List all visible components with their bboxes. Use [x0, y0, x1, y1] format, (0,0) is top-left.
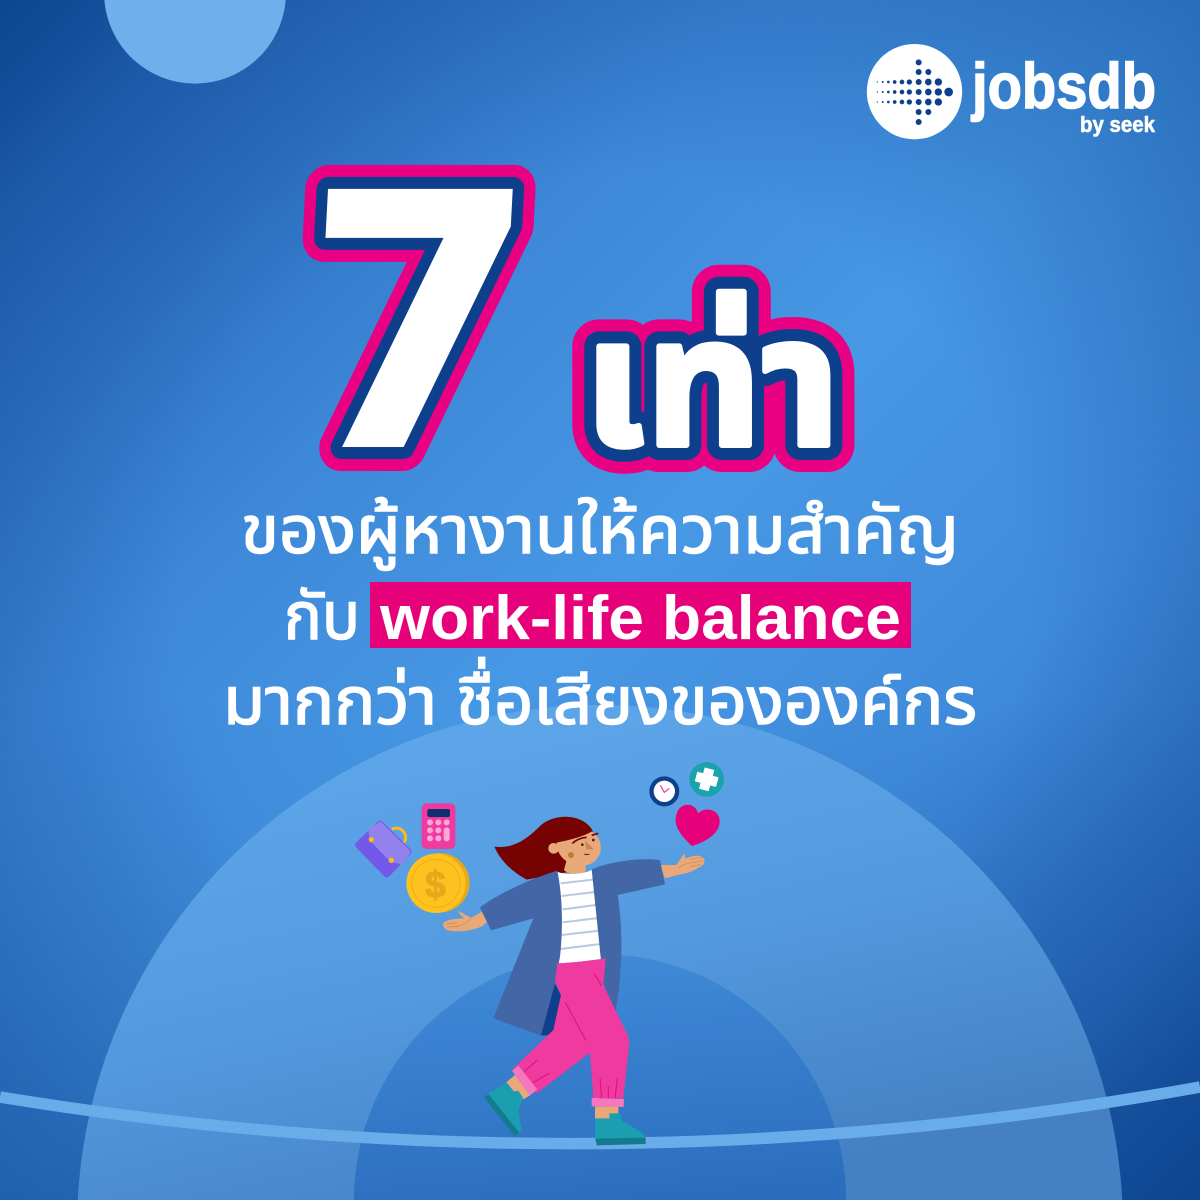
- icon: medical plus: [689, 762, 724, 797]
- highlighted phrase: work-life balance: [379, 584, 901, 653]
- inner arch: [354, 954, 846, 1200]
- icon: clock: [649, 776, 679, 806]
- logo tagline: by seek: [1080, 112, 1156, 137]
- hair back: [494, 817, 597, 880]
- headline word: เท่า: เท่า: [584, 283, 840, 484]
- boot left: [484, 1082, 523, 1137]
- headline word: เท่า: เท่า: [584, 283, 840, 484]
- hand left: [443, 911, 487, 931]
- headline word: เท่า: เท่า: [584, 283, 840, 484]
- neck and head: [548, 832, 601, 875]
- shirt: [557, 869, 606, 963]
- subheading line 1: ของผู้หางานให้ความสำคัญ: [241, 493, 959, 571]
- ankles: [505, 1075, 618, 1120]
- big number 7: 7: [288, 119, 543, 531]
- big number 7: 7: [288, 119, 543, 531]
- icon: briefcase: [358, 823, 409, 874]
- icon: heart: [676, 805, 720, 846]
- icon: calculator: [422, 803, 455, 849]
- logo: jobsdb by seek: [867, 44, 1156, 139]
- decorative circle top left: [104, 0, 286, 84]
- highlight bar: [370, 582, 911, 648]
- subheading line 2: กับ: [284, 579, 360, 653]
- icon: gold coin: $: [425, 863, 446, 905]
- tightrope: [0, 1087, 1200, 1144]
- subheading line 2: [284, 579, 911, 653]
- coat: [480, 859, 665, 1036]
- boot right: [595, 1113, 646, 1145]
- subheading line 3: มากกว่า ชื่อเสียงขององค์กร: [223, 657, 977, 738]
- icon: gold coin: [406, 853, 470, 913]
- trousers: [512, 958, 629, 1107]
- logo wordmark: jobsdb: [971, 50, 1156, 122]
- coat lining: [541, 983, 561, 1035]
- large arch: [78, 705, 1122, 1200]
- illustration: woman balancing on tightrope: [358, 762, 724, 1145]
- hand right: [660, 853, 705, 878]
- logo badge: [867, 44, 962, 139]
- big number 7: 7: [288, 119, 543, 531]
